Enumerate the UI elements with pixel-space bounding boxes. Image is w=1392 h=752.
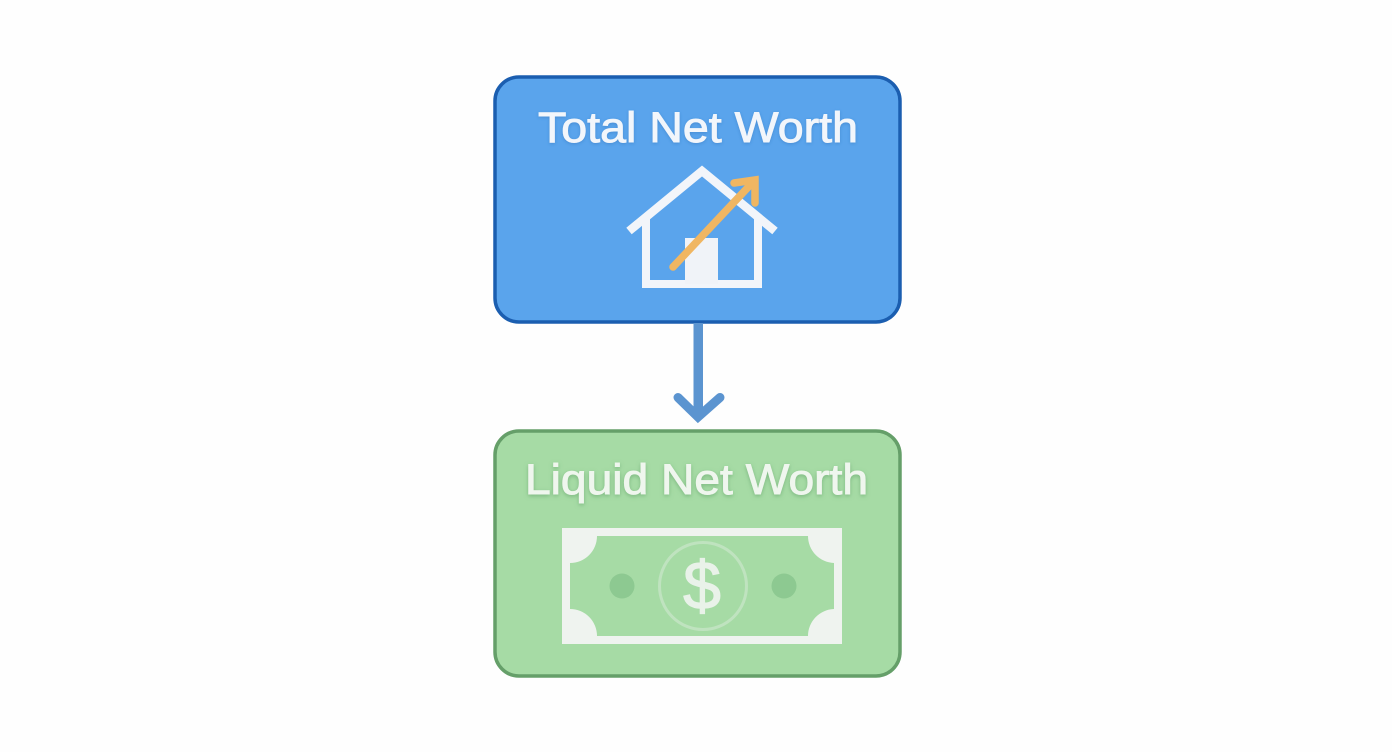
heading: total net worth: Total Net Worth — [538, 104, 858, 152]
icon: dollar bill — [562, 528, 842, 644]
panel: total net worth — [495, 77, 900, 322]
arrow: total to liquid — [678, 323, 720, 417]
panel background: blue box — [495, 77, 900, 322]
icon: house with rising arrow — [629, 171, 775, 284]
panel background: green box — [495, 431, 900, 676]
heading: liquid net worth: Liquid Net Worth — [525, 456, 868, 504]
icon: dollar bill: $ — [683, 548, 721, 624]
panel: liquid net worth — [495, 431, 900, 676]
